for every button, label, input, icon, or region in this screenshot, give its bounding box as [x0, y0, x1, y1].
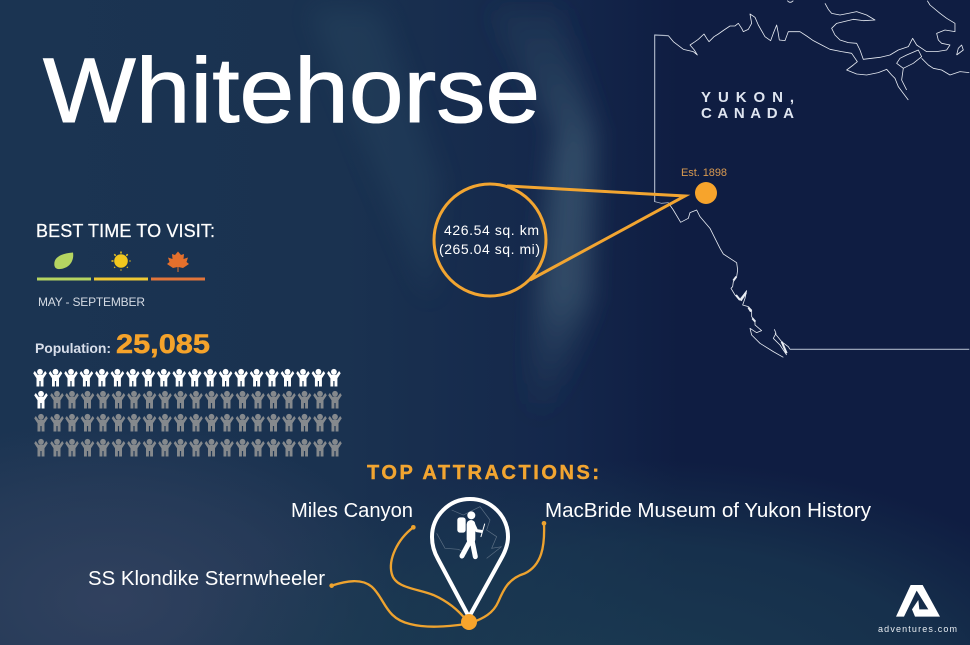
icon: map pin with hiker	[432, 499, 508, 630]
orange anchor dot	[461, 614, 477, 630]
title: Whitehorse	[43, 40, 540, 142]
top attractions heading: TOP ATTRACTIONS:	[367, 462, 599, 484]
icon: leaf	[54, 252, 73, 269]
best time to visit heading: BEST TIME TO VISIT:	[36, 221, 215, 241]
location dot	[695, 182, 717, 204]
population label: Population:	[35, 340, 111, 356]
pin map tracery	[437, 507, 502, 558]
map label: Yukon, Canada: CANADA	[701, 105, 794, 122]
established label: Est. 1898	[681, 167, 727, 179]
pictogram: population	[33, 369, 342, 456]
map label: Yukon, Canada	[701, 89, 794, 122]
logo: adventures.com: adventures.com	[878, 624, 957, 634]
area callout	[434, 184, 685, 296]
area callout: (265.04 sq. mi)	[439, 241, 540, 257]
attraction label: MacBride Museum: MacBride Museum of Yukon History	[545, 500, 871, 522]
population number: 25,085	[116, 329, 210, 359]
season icons and bars	[37, 252, 205, 280]
hiker	[457, 511, 485, 557]
area callout: 426.54 sq. km	[444, 222, 539, 238]
date range: MAY - SEPTEMBER	[38, 295, 145, 309]
icon: maple leaf	[167, 252, 189, 272]
logo: adventures.com	[878, 585, 957, 634]
icon: sun	[112, 252, 130, 270]
attraction label: SS Klondike: SS Klondike Sternwheeler	[88, 568, 325, 590]
attraction connectors	[329, 521, 546, 627]
season bars	[37, 278, 91, 280]
attraction label: Miles Canyon: Miles Canyon	[291, 500, 413, 522]
map: Yukon and coastline	[655, 1, 969, 357]
map label: Yukon, Canada: YUKON,	[701, 89, 794, 106]
